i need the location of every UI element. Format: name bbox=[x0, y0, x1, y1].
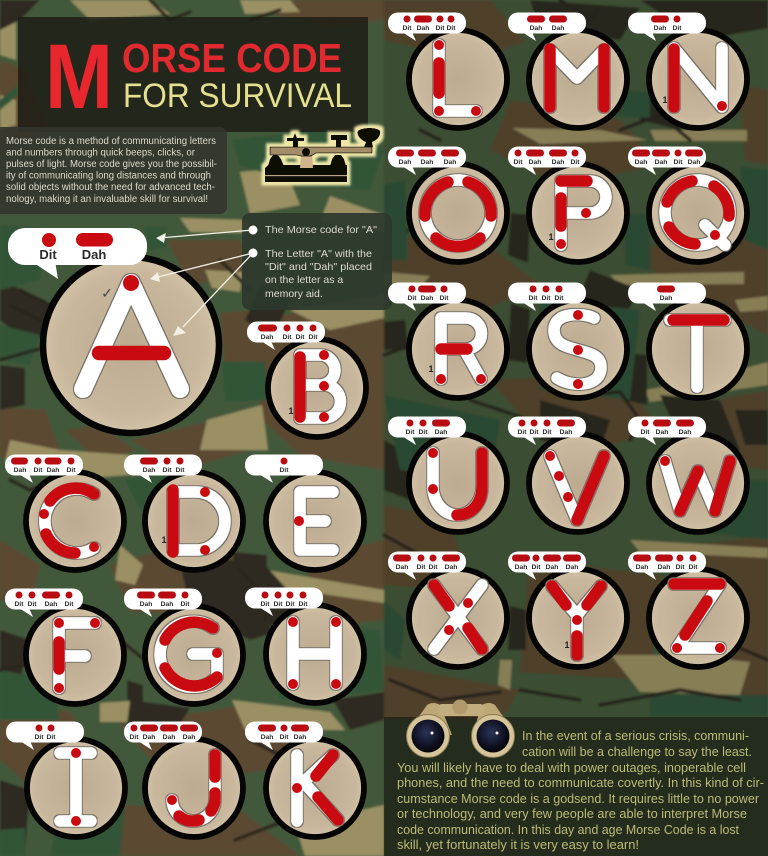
letter S dits bbox=[573, 310, 583, 389]
letter X strokes bbox=[434, 585, 482, 649]
letter Z strokes bbox=[674, 584, 720, 648]
letter F strokes bbox=[59, 623, 95, 688]
code bubble: Dah Dit Dit Dit: Dit bbox=[282, 334, 292, 341]
code bubble: Dah Dit Dit Dit bbox=[247, 322, 325, 350]
legend item: letter with memory aid: The Letter "A" with the bbox=[265, 248, 372, 260]
stroke number: 1 bbox=[564, 640, 570, 650]
stroke number: 1 bbox=[428, 364, 434, 374]
ring bbox=[409, 434, 507, 532]
code bubble: Dit Dit Dah: Dah bbox=[435, 429, 447, 436]
code bubble: Dit Dit Dah Dit: Dah bbox=[45, 601, 57, 608]
title panel bbox=[18, 17, 368, 132]
code bubble: Dit Dah Dah Dah: Dit bbox=[129, 734, 139, 741]
code bubble: Dit Dah Dit: Dah bbox=[421, 295, 433, 302]
letter R badge bbox=[388, 282, 507, 398]
letter H dits bbox=[288, 617, 341, 689]
letter R morse marks bbox=[436, 349, 486, 384]
closing text panel: phones, and the need to communicate covertly. In this kind of cir- bbox=[397, 775, 764, 790]
code bubble: Dah Dit Dah Dah: Dit bbox=[531, 564, 541, 571]
legend item: letter with memory aid bbox=[265, 248, 372, 300]
letter E dit bbox=[294, 516, 304, 526]
letter Q badge bbox=[628, 146, 747, 262]
icon: binoculars bbox=[406, 700, 514, 758]
code bubble: Dah Dah Dit Dit: Dit bbox=[675, 564, 685, 571]
stroke order check mark: ✓ bbox=[101, 285, 113, 301]
code bubble: Dah Dit Dit Dit: Dit bbox=[308, 334, 318, 341]
code bubble: Dit Dah Dah Dit: Dah bbox=[529, 159, 541, 166]
letter D morse marks bbox=[173, 487, 210, 555]
ring bbox=[145, 606, 243, 704]
code bubble: Dah Dit Dah Dit: Dah bbox=[14, 467, 26, 474]
letter O morse marks bbox=[425, 182, 491, 246]
letter J strokes bbox=[172, 755, 215, 821]
letter V morse marks bbox=[545, 451, 604, 520]
letter L morse marks bbox=[434, 40, 481, 116]
code bubble: Dah Dit Dah Dah: Dah bbox=[515, 564, 527, 571]
letter C badge bbox=[5, 454, 124, 570]
letter X badge bbox=[388, 552, 507, 667]
ring bbox=[649, 300, 747, 398]
code bubble: Dah Dit Dit Dah: Dah bbox=[445, 564, 457, 571]
code bubble: Dit Dah Dit Dit: Dit bbox=[446, 25, 456, 32]
closing text panel: code communication. In this day and age Morse Code is a lost bbox=[397, 822, 739, 837]
code bubble: Dah Dah Dit Dah: Dah bbox=[688, 159, 700, 166]
code bubble: Dit Dit Dit Dit: Dit bbox=[298, 601, 308, 608]
code bubble: Dit Dit Dit Dit: Dit bbox=[285, 601, 295, 608]
ring bbox=[145, 739, 243, 837]
code bubble: Dah Dah Dah bbox=[388, 146, 466, 175]
code bubble: Dit Dah Dit Dit: Dit bbox=[435, 25, 445, 32]
code bubble: Dah Dah Dit: Dah bbox=[161, 601, 173, 608]
letter H strokes bbox=[293, 622, 336, 684]
ring bbox=[409, 30, 507, 128]
letter Y strokes bbox=[552, 586, 601, 655]
closing text panel: cation will be a challenge to say the least. bbox=[522, 744, 752, 759]
letter I strokes bbox=[60, 753, 91, 821]
code bubble: Dah Dah Dit Dah bbox=[628, 146, 706, 175]
letter O badge bbox=[388, 146, 507, 262]
ring bbox=[409, 300, 507, 398]
intro text block: pulses of light. Morse code gives you the possibil- bbox=[6, 159, 217, 170]
letter I dits bbox=[71, 748, 81, 826]
letter G morse marks bbox=[165, 622, 222, 686]
letter N badge bbox=[628, 12, 747, 128]
code bubble: Dit Dah Dit: Dit bbox=[439, 295, 449, 302]
code bubble: Dit Dit Dit Dit: Dit bbox=[260, 601, 270, 608]
ring bbox=[529, 434, 627, 532]
code bubble: Dit Dit Dah Dit: Dit bbox=[64, 601, 74, 608]
code bubble: Dah Dit Dah Dit: Dit bbox=[33, 467, 43, 474]
code bubble: Dit Dah Dit bbox=[388, 282, 466, 311]
legend item: Morse code for A: The Morse code for "A" bbox=[265, 224, 377, 236]
ring bbox=[649, 164, 747, 262]
title big M: M bbox=[45, 26, 113, 128]
legend item: letter with memory aid: on the letter as a bbox=[265, 274, 343, 286]
legend item: letter with memory aid: "Dit" and "Dah" placed bbox=[265, 261, 372, 273]
code bubble: Dit Dah Dah bbox=[628, 416, 706, 445]
ring bbox=[529, 164, 627, 262]
letter Z morse marks bbox=[672, 584, 725, 653]
letter J badge bbox=[124, 722, 243, 837]
ring bbox=[268, 339, 366, 437]
code bubble: Dit Dah Dit: Dit bbox=[407, 295, 417, 302]
code bubble: Dit Dah Dit Dit: Dit bbox=[402, 25, 412, 32]
code bubble: Dah Dit: Dit bbox=[672, 25, 682, 32]
letter M badge bbox=[508, 12, 627, 128]
code bubble: Dah Dit Dah Dah: Dah bbox=[546, 564, 558, 571]
letter K strokes bbox=[297, 755, 338, 821]
letter M morse marks bbox=[550, 49, 604, 107]
ring bbox=[409, 569, 507, 667]
closing text panel: or technology, and very few people are able to interpret Morse bbox=[397, 806, 747, 821]
code bubble: Dah Dit Dit: Dah bbox=[143, 467, 155, 474]
code bubble: Dit Dah Dit Dit bbox=[388, 12, 466, 41]
code bubble: Dah Dit Dah: Dah bbox=[294, 734, 306, 741]
code bubble: Dah Dah bbox=[508, 12, 586, 41]
code bubble: Dit Dah: Dit bbox=[39, 247, 57, 262]
code bubble: Dit Dit Dit: Dit bbox=[554, 295, 564, 302]
letter O strokes bbox=[425, 180, 491, 246]
letter W morse marks bbox=[660, 456, 730, 511]
code bubble: Dah Dit Dit: Dit bbox=[162, 467, 172, 474]
letter G strokes bbox=[160, 621, 217, 687]
letter H badge bbox=[245, 588, 364, 703]
code bubble: Dah Dah Dit Dah: Dah bbox=[655, 159, 667, 166]
letter D badge bbox=[124, 454, 243, 570]
letter L strokes bbox=[439, 45, 476, 111]
letter P morse marks bbox=[556, 181, 591, 249]
ring bbox=[266, 605, 364, 703]
code bubble: Dit Dit Dit Dah: Dit bbox=[517, 429, 527, 436]
legend item: letter with memory aid: memory aid. bbox=[265, 288, 323, 300]
ring bbox=[26, 472, 124, 570]
stroke number: 1 bbox=[662, 95, 668, 105]
letter F badge bbox=[5, 588, 124, 704]
code bubble: Dit Dah bbox=[8, 228, 147, 279]
letter G badge bbox=[124, 588, 243, 704]
letter S strokes bbox=[554, 315, 601, 384]
ring bbox=[266, 739, 364, 837]
ring bbox=[26, 606, 124, 704]
ring bbox=[529, 30, 627, 128]
letter T badge bbox=[628, 282, 747, 398]
letter N strokes bbox=[674, 48, 722, 107]
letter I badge bbox=[6, 722, 125, 837]
code bubble: Dah Dit Dit: Dit bbox=[175, 467, 185, 474]
legend panel bbox=[242, 213, 392, 310]
stroke number: 1 bbox=[288, 406, 294, 416]
letter U morse marks bbox=[428, 448, 482, 515]
letter A badge bbox=[8, 228, 219, 433]
letter B strokes bbox=[300, 355, 340, 418]
code bubble: Dit Dah Dah Dah: Dah bbox=[163, 734, 175, 741]
code bubble: Dah Dit Dit Dit: Dah bbox=[261, 334, 273, 341]
letter Y morse marks bbox=[552, 586, 601, 655]
code bubble: Dah Dah Dah: Dah bbox=[444, 159, 456, 166]
title line: ORSE CODE: ORSE CODE bbox=[122, 35, 342, 81]
code bubble: Dit Dit Dah Dit: Dit bbox=[14, 601, 24, 608]
intro text block: ity of communicating long distances and through bbox=[6, 170, 211, 182]
letter E strokes bbox=[300, 492, 333, 550]
ring bbox=[43, 257, 219, 433]
intro text block: nology, making it an invaluable skill for survival! bbox=[6, 194, 208, 205]
closing text panel: skill, yet fortunately it is very easy to learn! bbox=[397, 837, 639, 852]
code bubble: Dah Dah: Dah bbox=[530, 25, 542, 32]
code bubble: Dit Dah Dah: Dah bbox=[679, 429, 691, 436]
closing text panel bbox=[384, 717, 768, 856]
code bubble: Dah Dah Dit Dit: Dah bbox=[658, 564, 670, 571]
code bubble: Dit Dit Dit Dah: Dit bbox=[542, 429, 552, 436]
code bubble: Dah: Dah bbox=[660, 295, 672, 302]
letter U strokes bbox=[433, 453, 482, 515]
code bubble: Dah Dit Dah: Dit bbox=[279, 734, 289, 741]
code bubble: Dit Dit Dah: Dit bbox=[405, 429, 415, 436]
code bubble: Dit Dit Dit Dah: Dah bbox=[560, 429, 572, 436]
code bubble: Dah Dah Dit Dit bbox=[628, 552, 706, 580]
letter S badge bbox=[508, 282, 627, 398]
code bubble: Dit Dit: Dit bbox=[46, 734, 56, 741]
code bubble: Dah Dit Dit Dah bbox=[388, 552, 466, 580]
icon: telegraph key bbox=[265, 128, 380, 182]
closing text panel: In the event of a serious crisis, communi- bbox=[522, 728, 749, 743]
intro text block: solid objects without the need for advanced tech- bbox=[6, 182, 215, 193]
code bubble: Dah Dah Dah: Dah bbox=[399, 159, 411, 166]
letter V strokes bbox=[550, 456, 604, 520]
code bubble: Dah Dah Dah: Dah bbox=[421, 159, 433, 166]
closing text panel: cumstance Morse code is a godsend. It requires little to no power bbox=[397, 791, 760, 806]
letter J morse marks bbox=[167, 755, 215, 821]
letter U badge bbox=[388, 416, 507, 532]
ring bbox=[529, 300, 627, 398]
letter F morse marks bbox=[54, 618, 100, 693]
code bubble: Dah Dah Dit Dit: Dah bbox=[636, 564, 648, 571]
code bubble: Dah Dit Dah Dah bbox=[508, 552, 586, 580]
arrows from legend bbox=[150, 226, 258, 336]
code bubble: Dit Dah: Dah bbox=[82, 247, 106, 262]
code bubble: Dit Dit: Dit bbox=[34, 734, 44, 741]
ring bbox=[649, 30, 747, 128]
ring bbox=[145, 472, 243, 570]
stroke number: 1 bbox=[548, 232, 554, 242]
ring bbox=[27, 739, 125, 837]
code bubble: Dah Dit Dit Dah: Dit bbox=[416, 564, 426, 571]
letter A strokes bbox=[83, 283, 180, 389]
code bubble: Dit Dah Dah: Dah bbox=[656, 429, 668, 436]
code bubble: Dit Dit Dit bbox=[508, 282, 586, 311]
code bubble: Dah Dah Dit Dah: Dah bbox=[635, 159, 647, 166]
code bubble: Dah Dit Dah Dit bbox=[5, 454, 83, 483]
code bubble: Dit Dit Dit: Dit bbox=[528, 295, 538, 302]
code bubble: Dah Dit Dah: Dah bbox=[261, 734, 273, 741]
code bubble: Dit Dah Dit Dit: Dah bbox=[417, 25, 429, 32]
code bubble: Dit Dah Dah Dit: Dah bbox=[552, 159, 564, 166]
code bubble: Dah Dah Dit Dah: Dit bbox=[673, 159, 683, 166]
intro text block bbox=[0, 127, 227, 214]
letter X morse marks bbox=[434, 585, 482, 649]
code bubble: Dit: Dit bbox=[279, 467, 289, 474]
code bubble: Dah Dit Dit Dah: Dit bbox=[428, 564, 438, 571]
letter T strokes bbox=[670, 320, 725, 387]
ring bbox=[649, 569, 747, 667]
code bubble: Dit Dit Dit Dah bbox=[508, 416, 586, 445]
letter L badge bbox=[388, 12, 507, 128]
closing text panel: You will likely have to deal with power outages, inoperable cell bbox=[397, 760, 746, 775]
code bubble: Dah Dah Dit Dit: Dit bbox=[688, 564, 698, 571]
letter Y badge bbox=[508, 552, 627, 667]
stroke number: 1 bbox=[161, 535, 167, 545]
letter Z badge bbox=[628, 552, 747, 667]
code bubble: Dit Dah Dah Dit: Dit bbox=[513, 159, 523, 166]
ring bbox=[266, 472, 364, 570]
code bubble: Dit Dit Dah bbox=[388, 416, 466, 445]
title line: FOR SURVIVAL: FOR SURVIVAL bbox=[123, 77, 352, 115]
code bubble: Dit Dah Dah: Dit bbox=[640, 429, 650, 436]
code bubble: Dit Dah Dah Dah: Dah bbox=[143, 734, 155, 741]
code bubble: Dah Dit bbox=[628, 12, 706, 41]
code bubble: Dah Dah Dit: Dit bbox=[180, 601, 190, 608]
ring bbox=[649, 434, 747, 532]
code bubble: Dah Dit Dah bbox=[245, 722, 323, 750]
code bubble: Dit Dit Dit Dit: Dit bbox=[273, 601, 283, 608]
code bubble: Dit Dit Dit: Dit bbox=[541, 295, 551, 302]
letter W strokes bbox=[665, 461, 730, 511]
intro text block: and numbers through quick beeps, clicks, or bbox=[6, 148, 196, 158]
letter B badge bbox=[247, 322, 366, 437]
letter M strokes bbox=[550, 50, 604, 107]
letter K morse marks bbox=[292, 755, 338, 820]
ring bbox=[409, 164, 507, 262]
code bubble: Dit Dah Dah Dit bbox=[508, 146, 586, 175]
letter Q strokes bbox=[665, 180, 730, 245]
letter N morse marks bbox=[674, 49, 727, 111]
code bubble: Dit Dit Dit Dit bbox=[245, 588, 323, 616]
code bubble: Dit Dah Dah Dit: Dit bbox=[570, 159, 580, 166]
code bubble: Dah Dit Dit Dah: Dah bbox=[396, 564, 408, 571]
letter C strokes bbox=[45, 489, 94, 553]
letter A crossbar bbox=[99, 346, 164, 360]
letter K badge bbox=[245, 722, 364, 837]
code bubble: Dah Dit Dah Dit: Dit bbox=[66, 467, 76, 474]
letter C morse marks bbox=[39, 488, 99, 553]
letter Q morse marks bbox=[667, 181, 729, 244]
code bubble: Dah Dit Dit Dit: Dit bbox=[295, 334, 305, 341]
code bubble: Dit Dit Dah Dit: Dit bbox=[27, 601, 37, 608]
letter D strokes bbox=[173, 492, 225, 550]
intro text block: Morse code is a method of communicating letters bbox=[6, 136, 216, 147]
letter R strokes bbox=[441, 318, 482, 379]
code bubble: Dit Dit Dit Dah: Dit bbox=[529, 429, 539, 436]
letter B morse marks bbox=[300, 350, 329, 422]
code bubble: Dah Dit Dah Dit: Dah bbox=[47, 467, 59, 474]
code bubble: Dit Dit Dah Dit bbox=[5, 588, 83, 617]
letter T dah bbox=[673, 314, 724, 326]
code bubble: Dah Dit: Dah bbox=[654, 25, 666, 32]
code bubble: Dah Dah: Dah bbox=[552, 25, 564, 32]
letter A dit bbox=[123, 275, 139, 291]
code bubble: Dit Dah Dah Dah bbox=[124, 722, 202, 750]
letter P strokes bbox=[561, 181, 606, 245]
letter E badge bbox=[245, 454, 364, 570]
ring bbox=[529, 569, 627, 667]
code bubble: Dah Dit Dit bbox=[124, 454, 202, 483]
letter P badge bbox=[508, 146, 627, 262]
code bubble: Dit Dit Dah: Dit bbox=[418, 429, 428, 436]
code bubble: Dit Dit bbox=[6, 722, 84, 750]
code bubble: Dit Dah Dah Dah: Dah bbox=[183, 734, 195, 741]
code bubble: Dah Dit Dah Dah: Dah bbox=[566, 564, 578, 571]
code bubble: Dah Dah Dit bbox=[124, 588, 202, 617]
code bubble: Dah Dah Dit: Dah bbox=[140, 601, 152, 608]
letter W badge bbox=[628, 416, 747, 532]
letter V badge bbox=[508, 416, 627, 532]
